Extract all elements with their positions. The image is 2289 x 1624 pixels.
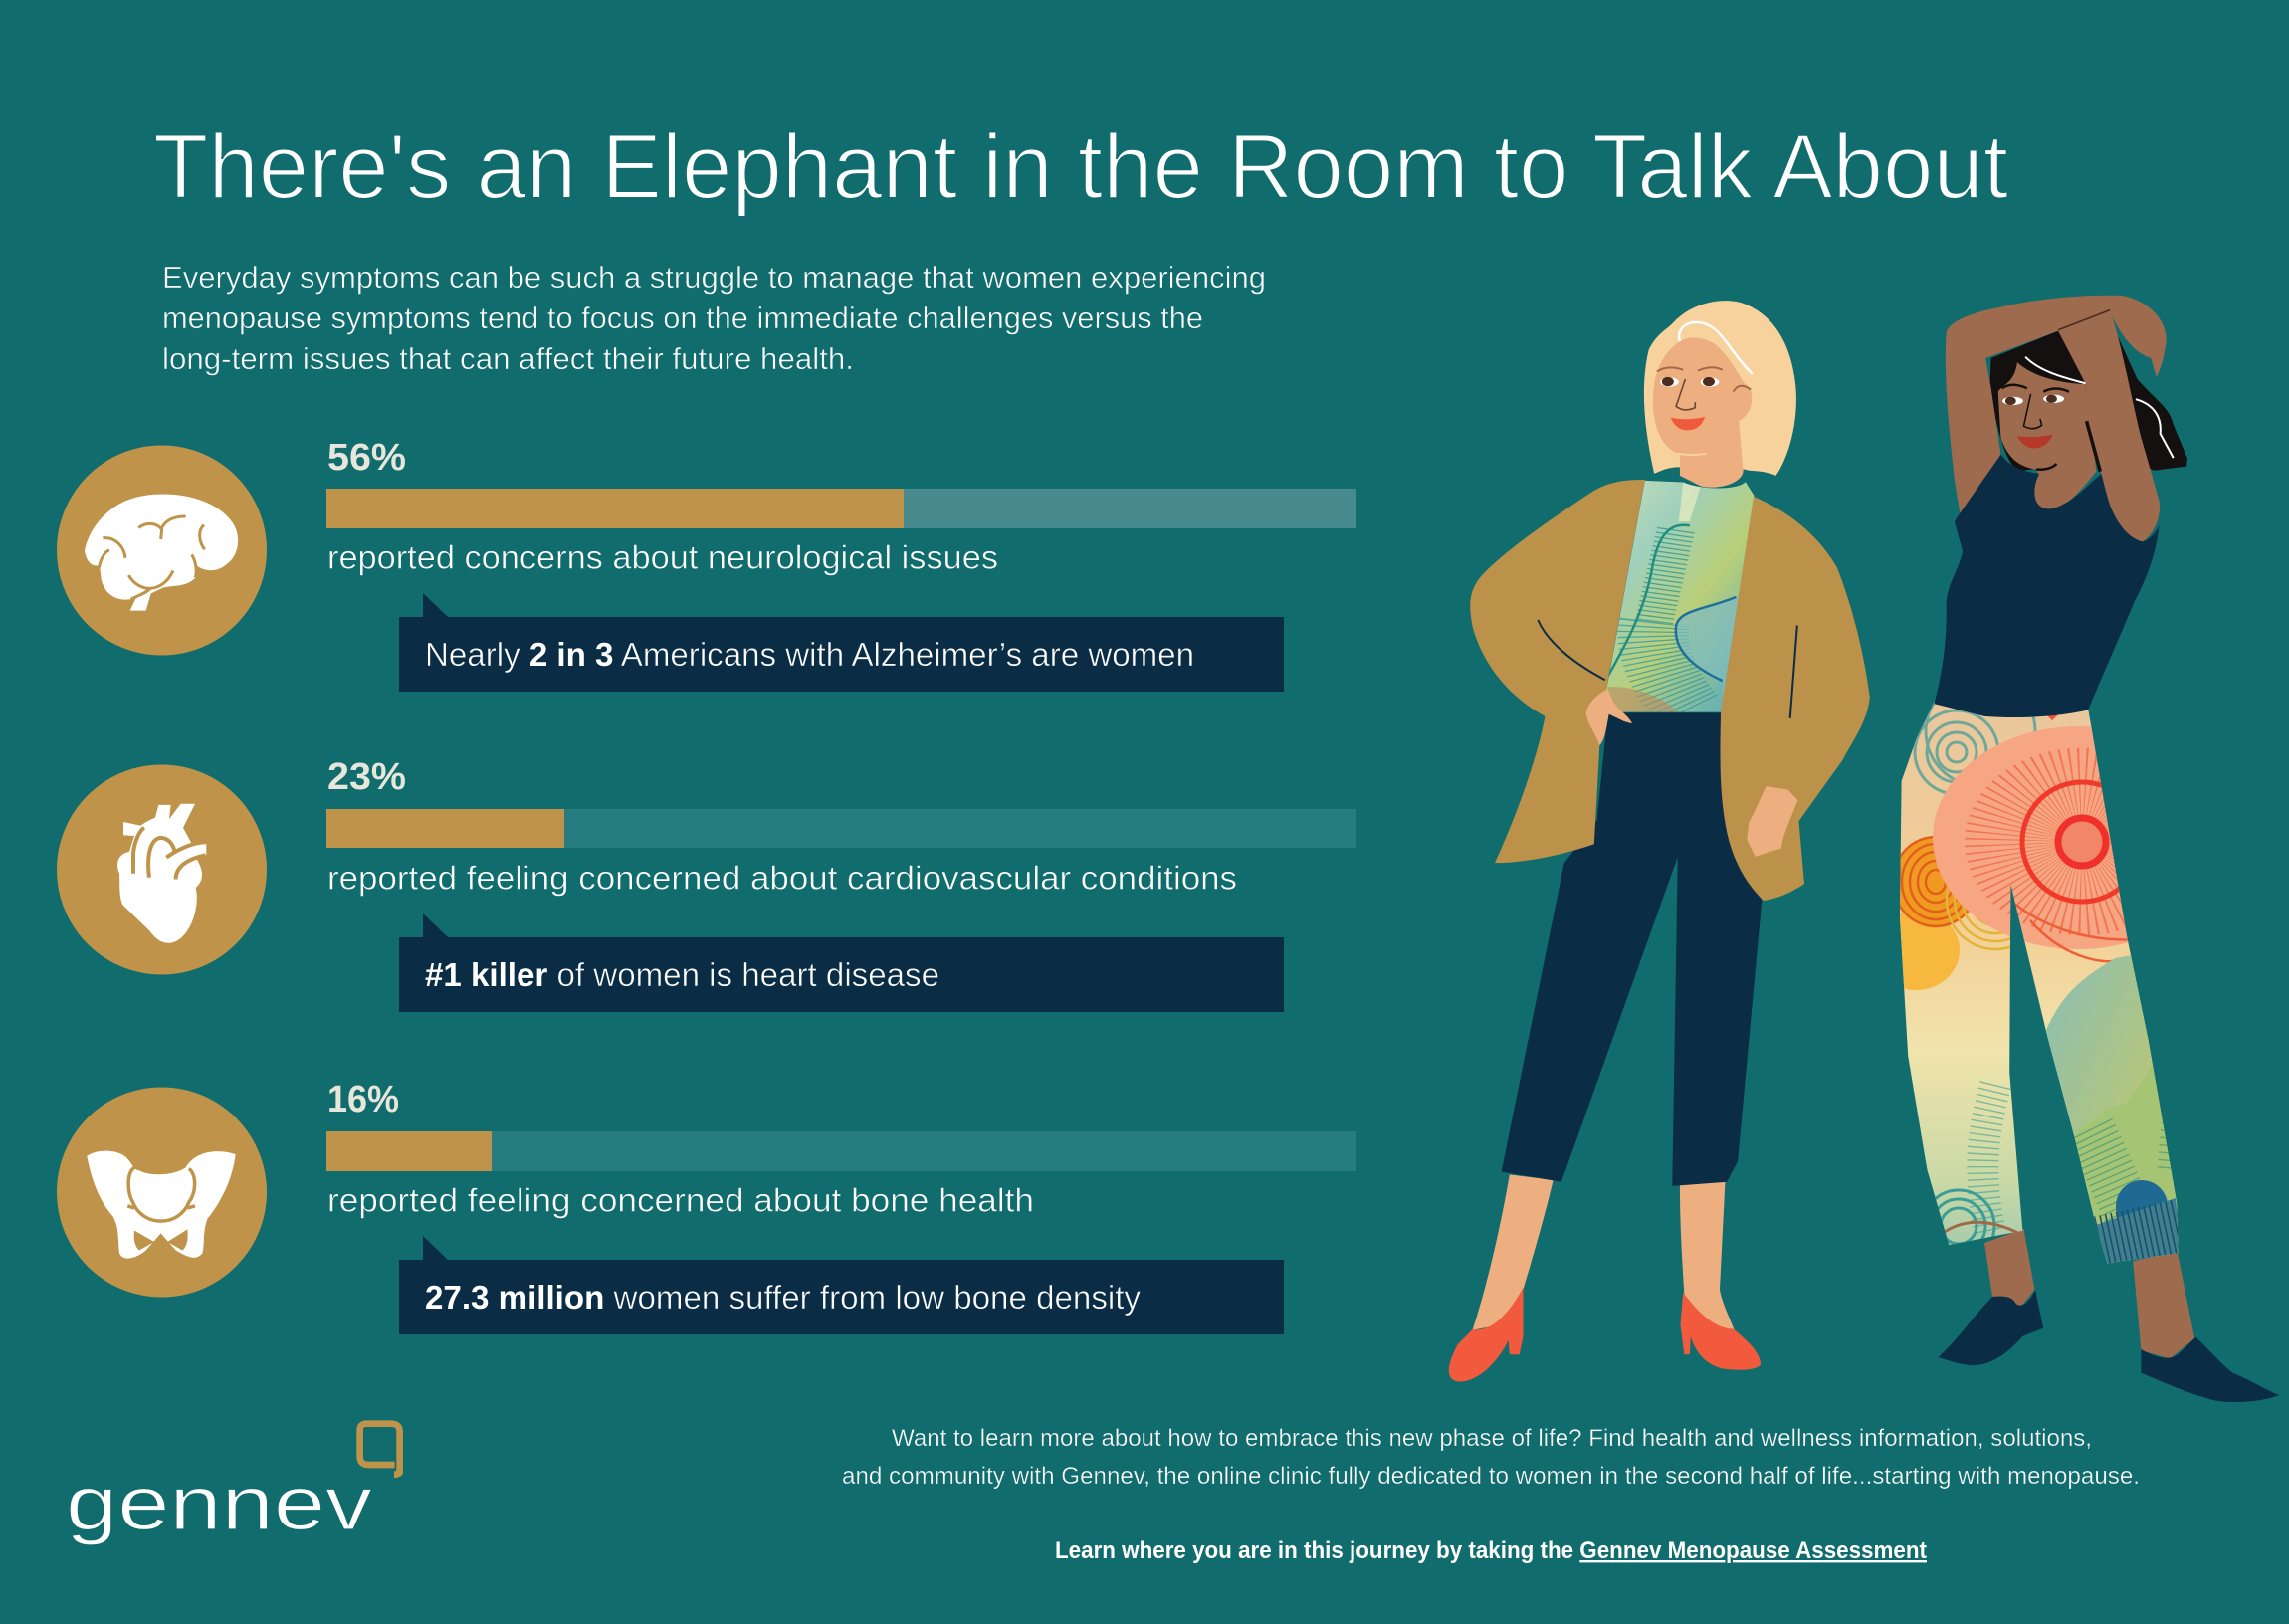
footer text bbox=[842, 1425, 2140, 1564]
patterned trousers bbox=[1899, 702, 2179, 1264]
icon: speech bubble mark bbox=[360, 1424, 400, 1475]
torso, arms and head bbox=[1935, 296, 2187, 717]
panel: neurological bbox=[57, 437, 1356, 692]
callout: 27.3 million women suffer from low bone density bbox=[425, 1279, 1141, 1316]
hair, face and jacket bbox=[1470, 301, 1870, 901]
description: reported concerns about neurological issues bbox=[327, 539, 998, 575]
illustration: blonde woman in jacket bbox=[1449, 301, 1870, 1382]
callout: Nearly 2 in 3 Americans with Alzheimer’s are women bbox=[425, 636, 1194, 673]
bar chart: 23% bbox=[326, 809, 1356, 848]
callout: #1 killer of women is heart disease bbox=[425, 956, 939, 993]
intro paragraph bbox=[162, 260, 1266, 376]
icon: pelvis bbox=[57, 1087, 267, 1298]
legs and shoes bbox=[1938, 1229, 2279, 1402]
panel: bone health bbox=[57, 1079, 1356, 1334]
stat: 56%: 56% bbox=[327, 437, 406, 479]
intro paragraph: Everyday symptoms can be such a struggle to manage that women experiencing bbox=[162, 260, 1266, 295]
wordmark: gennev bbox=[66, 1461, 373, 1546]
trousers and legs bbox=[1449, 712, 1762, 1382]
icon: brain bbox=[57, 446, 267, 655]
logo: gennev bbox=[66, 1424, 400, 1546]
call to action: Learn where you are in this journey by taking the Gennev Menopause Assessment bbox=[1055, 1537, 1927, 1564]
intro paragraph: long-term issues that can affect their future health. bbox=[162, 341, 854, 376]
callout bbox=[399, 914, 1284, 1012]
title: There's an Elephant in the Room to Talk About bbox=[153, 116, 2008, 218]
footer text: Want to learn more about how to embrace this new phase of life? Find health and wellness information, solutions, bbox=[892, 1425, 2092, 1452]
stat: 23%: 23% bbox=[327, 756, 406, 798]
footer text: and community with Gennev, the online clinic fully dedicated to women in the second half of life...starting with menopause. bbox=[842, 1463, 2140, 1490]
intro paragraph: menopause symptoms tend to focus on the immediate challenges versus the bbox=[162, 301, 1203, 335]
callout bbox=[399, 1236, 1284, 1334]
patterned blouse bbox=[1606, 480, 1754, 712]
icon: heart bbox=[57, 764, 267, 975]
stat: 16%: 16% bbox=[327, 1079, 399, 1120]
description: reported feeling concerned about bone health bbox=[327, 1182, 1034, 1218]
bar chart: 16% bbox=[326, 1131, 1356, 1171]
callout bbox=[399, 593, 1284, 692]
panel: cardiovascular bbox=[57, 756, 1356, 1012]
description: reported feeling concerned about cardiovascular conditions bbox=[327, 860, 1237, 896]
illustration: woman stretching in patterned trousers bbox=[1872, 296, 2279, 1402]
bar chart: 56% bbox=[326, 489, 1356, 528]
